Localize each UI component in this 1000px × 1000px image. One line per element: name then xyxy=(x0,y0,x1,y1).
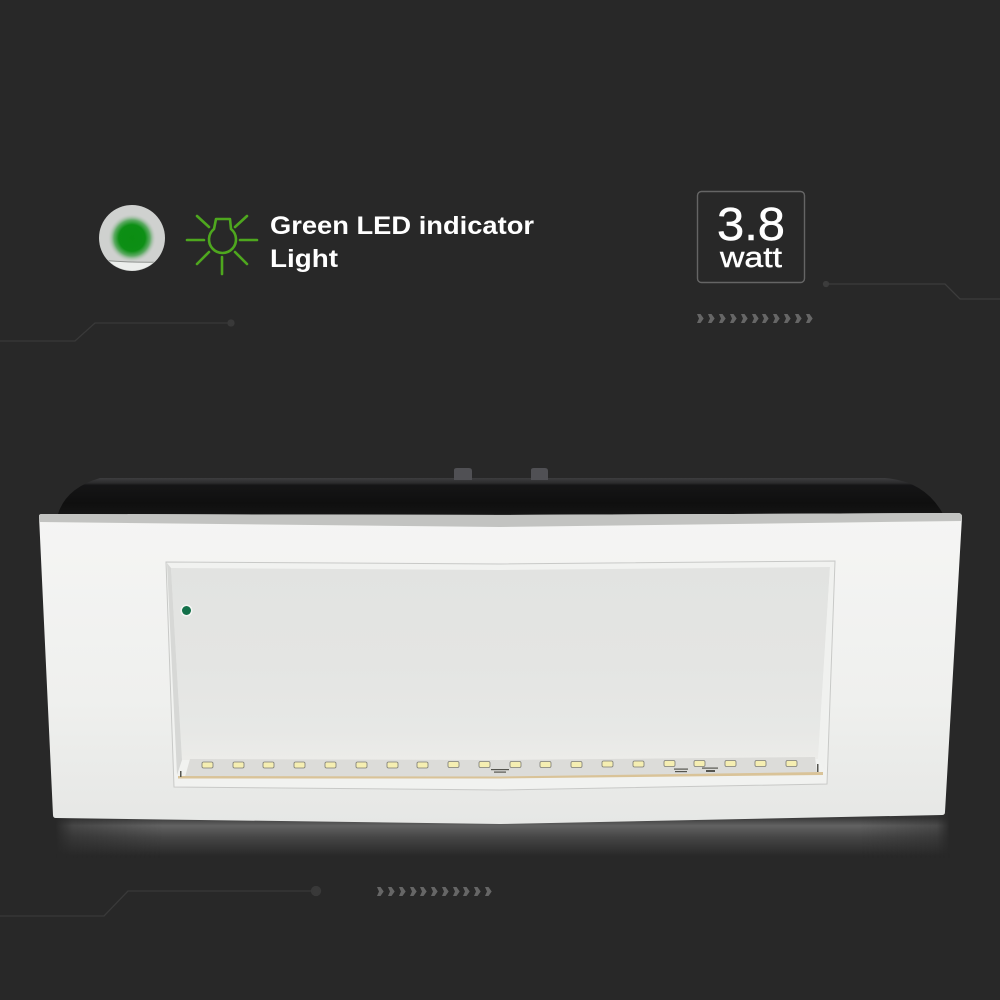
lamp white front frame xyxy=(39,513,962,824)
LED circuit strip xyxy=(178,757,823,778)
lamp mounting clips xyxy=(454,468,548,480)
chevrons: bottom xyxy=(377,887,492,896)
decorative circuit line: left upper xyxy=(0,320,234,341)
decorative circuit line: left lower xyxy=(0,886,320,916)
badge: 3.8 watt: 3.8 xyxy=(717,198,785,250)
badge: 3.8 watt xyxy=(698,192,804,282)
lamp lens window xyxy=(166,561,835,790)
strip printed markings xyxy=(180,764,818,777)
icon: green light bulb with rays xyxy=(187,216,257,274)
lamp rear housing xyxy=(58,478,943,514)
heading: Green LED indicator Light xyxy=(270,212,534,273)
heading: Green LED indicator Light: Green LED indicator xyxy=(270,212,534,240)
infographic canvas xyxy=(0,190,1000,916)
decorative circuit line: right upper xyxy=(824,282,1000,299)
icon: green LED close-up thumbnail xyxy=(99,205,166,275)
heading: Green LED indicator Light: Light xyxy=(270,245,339,273)
badge: 3.8 watt: watt xyxy=(719,242,782,274)
floor reflection below the lamp xyxy=(60,815,946,851)
product: emergency LED lamp xyxy=(39,468,962,824)
lamp frame top bevel xyxy=(39,513,962,527)
green LED indicator dot xyxy=(180,604,192,616)
chevrons: upper right xyxy=(697,314,813,323)
